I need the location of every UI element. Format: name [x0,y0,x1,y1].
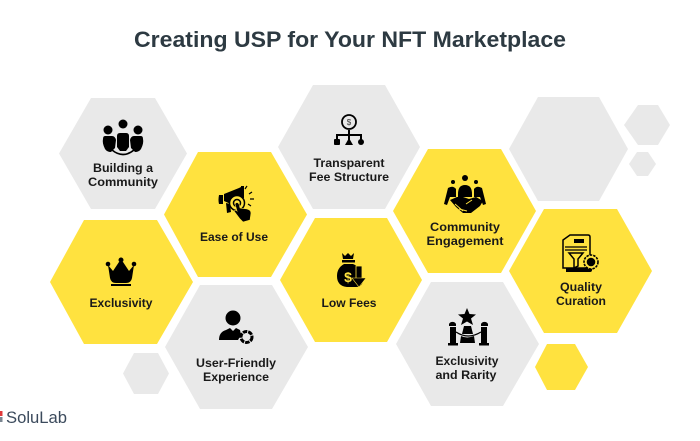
decorative hexagon: small grey bottom left [123,353,169,394]
panel: User-Friendly Experience [165,285,308,409]
decorative hexagon: large grey top right [509,97,628,201]
icon: fee hierarchy: $ [347,118,352,127]
panel: Transparent Fee Structure: Fee Structure [309,170,389,184]
decorative hexagon: smallest grey right [629,152,656,176]
panel: Exclusivity and Rarity: and Rarity [436,368,497,382]
title: Creating USP for Your NFT Marketplace [134,27,566,52]
panel: Community Engagement: Engagement [426,234,504,248]
panel: Community Engagement [393,149,536,273]
icon: money bag with arrow: $ [344,269,352,285]
label: Low Fees [322,296,377,310]
icon: megaphone and pointing hand [218,186,254,222]
label: User-Friendly [196,356,276,370]
panel: Quality Curation [509,209,652,333]
icon: community group [103,120,143,154]
label: Exclusivity [436,354,499,368]
panel: User-Friendly Experience: Experience [203,370,269,384]
icon: document with funnel and gear [563,235,598,272]
icon: money bag with arrow [337,253,366,287]
label: Transparent [314,156,384,170]
label: Ease of Use [200,230,268,244]
panel: Quality Curation: Curation [556,294,606,308]
panel: Exclusivity and Rarity [396,282,539,406]
label: Exclusivity [90,296,153,310]
label: Quality [560,280,602,294]
panel: Transparent Fee Structure [278,85,420,209]
icon: star with rope barrier [448,308,489,346]
panel: Building a Community: Community [88,175,158,189]
icon: handshake with people [444,175,486,213]
panel: Low Fees [280,218,422,342]
label: Building a [93,161,153,175]
decorative hexagon: small grey right [624,105,670,145]
icon: fee hierarchy [334,115,364,145]
panel: Exclusivity [50,220,193,344]
label: Community [430,220,500,234]
panel: Ease of Use [164,152,307,277]
logo: SoluLab: SoluLab [6,408,67,427]
decorative hexagon: small yellow [535,344,588,390]
icon: crown [106,258,136,286]
icon: user with gear [219,310,252,342]
panel: Building a Community [59,98,187,209]
